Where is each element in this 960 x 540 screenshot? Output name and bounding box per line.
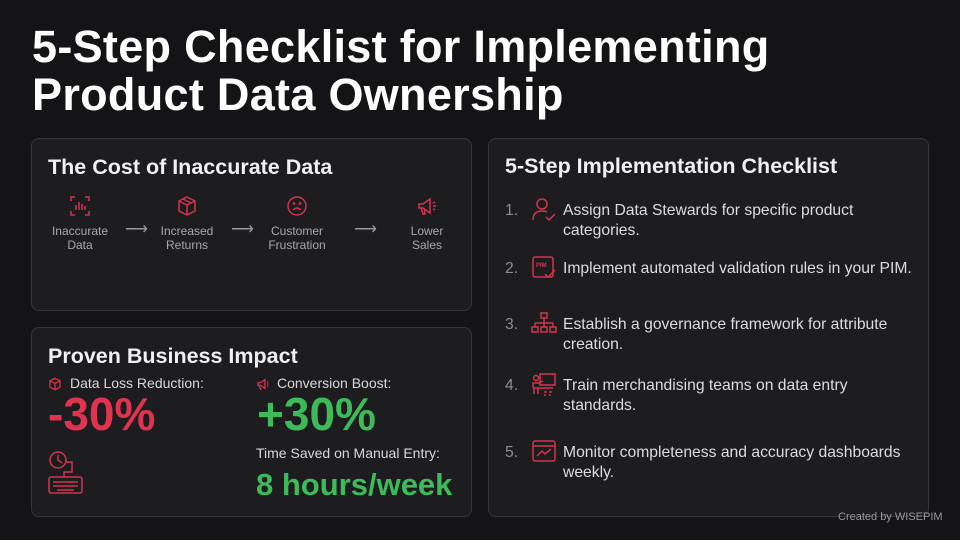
step 2: PIM xyxy=(536,263,547,269)
arrow: ⟶ xyxy=(125,221,148,238)
step 5: 5. xyxy=(505,444,518,461)
step 2 xyxy=(505,256,912,278)
stat: data loss reduction xyxy=(48,375,204,440)
icon: returns box xyxy=(178,196,196,216)
text: inaccurate data xyxy=(52,224,108,252)
stat: data loss reduction: -30% xyxy=(48,388,155,440)
icon: frown xyxy=(287,196,307,216)
panel: checklist xyxy=(488,138,929,517)
stat: time saved xyxy=(256,445,452,502)
stat: time saved: 8 hours/week xyxy=(256,467,452,502)
title: 5-Step Checklist for Implementing xyxy=(32,21,770,72)
text: increased returns: Returns xyxy=(166,238,208,252)
step 4: Train merchandising teams on data entry standards. xyxy=(563,377,848,414)
heading: cost: The Cost of Inaccurate Data xyxy=(48,155,332,179)
text: customer frustration xyxy=(268,224,326,252)
footer credit: Created by WISEPIM xyxy=(838,511,943,523)
step 1: Assign Data Stewards for specific product categories. xyxy=(563,202,853,239)
step 3: 3. xyxy=(505,316,518,333)
icon: clock keyboard xyxy=(48,451,83,494)
text: lower sales: Sales xyxy=(412,238,442,252)
text: inaccurate data: Data xyxy=(67,238,93,252)
step 2: Implement automated validation rules in your PIM. xyxy=(563,260,912,277)
text: increased returns: Increased xyxy=(161,224,213,238)
stat: data loss reduction: Data Loss Reduction: xyxy=(70,375,204,391)
text: customer frustration: Customer xyxy=(271,224,323,238)
title xyxy=(32,21,770,120)
step 1: 1. xyxy=(505,202,518,219)
title: Product Data Ownership xyxy=(32,69,564,120)
step 2: 2. xyxy=(505,260,518,277)
panel: business impact xyxy=(31,327,472,517)
icon: megaphone xyxy=(418,198,436,215)
text: lower sales xyxy=(411,224,444,252)
text: inaccurate data: Inaccurate xyxy=(52,224,108,238)
text: increased returns xyxy=(161,224,213,252)
heading: impact: Proven Business Impact xyxy=(48,344,298,368)
text: lower sales: Lower xyxy=(411,224,443,238)
step 5: Monitor completeness and accuracy dashboards weekly. xyxy=(563,444,900,481)
arrow: ⟶ xyxy=(354,221,377,238)
panel: cost of inaccurate data xyxy=(31,138,472,311)
heading: checklist: 5-Step Implementation Checklist xyxy=(505,154,837,178)
stat: conversion boost: +30% xyxy=(257,388,376,440)
stat: time saved: Time Saved on Manual Entry: xyxy=(256,445,440,461)
icon: inaccurate data xyxy=(70,196,90,216)
stat: conversion boost: Conversion Boost: xyxy=(277,375,391,391)
step 3: Establish a governance framework for attribute creation. xyxy=(563,316,887,353)
text: customer frustration: Frustration xyxy=(268,238,326,252)
arrow: ⟶ xyxy=(231,221,254,238)
step 4: 4. xyxy=(505,377,518,394)
